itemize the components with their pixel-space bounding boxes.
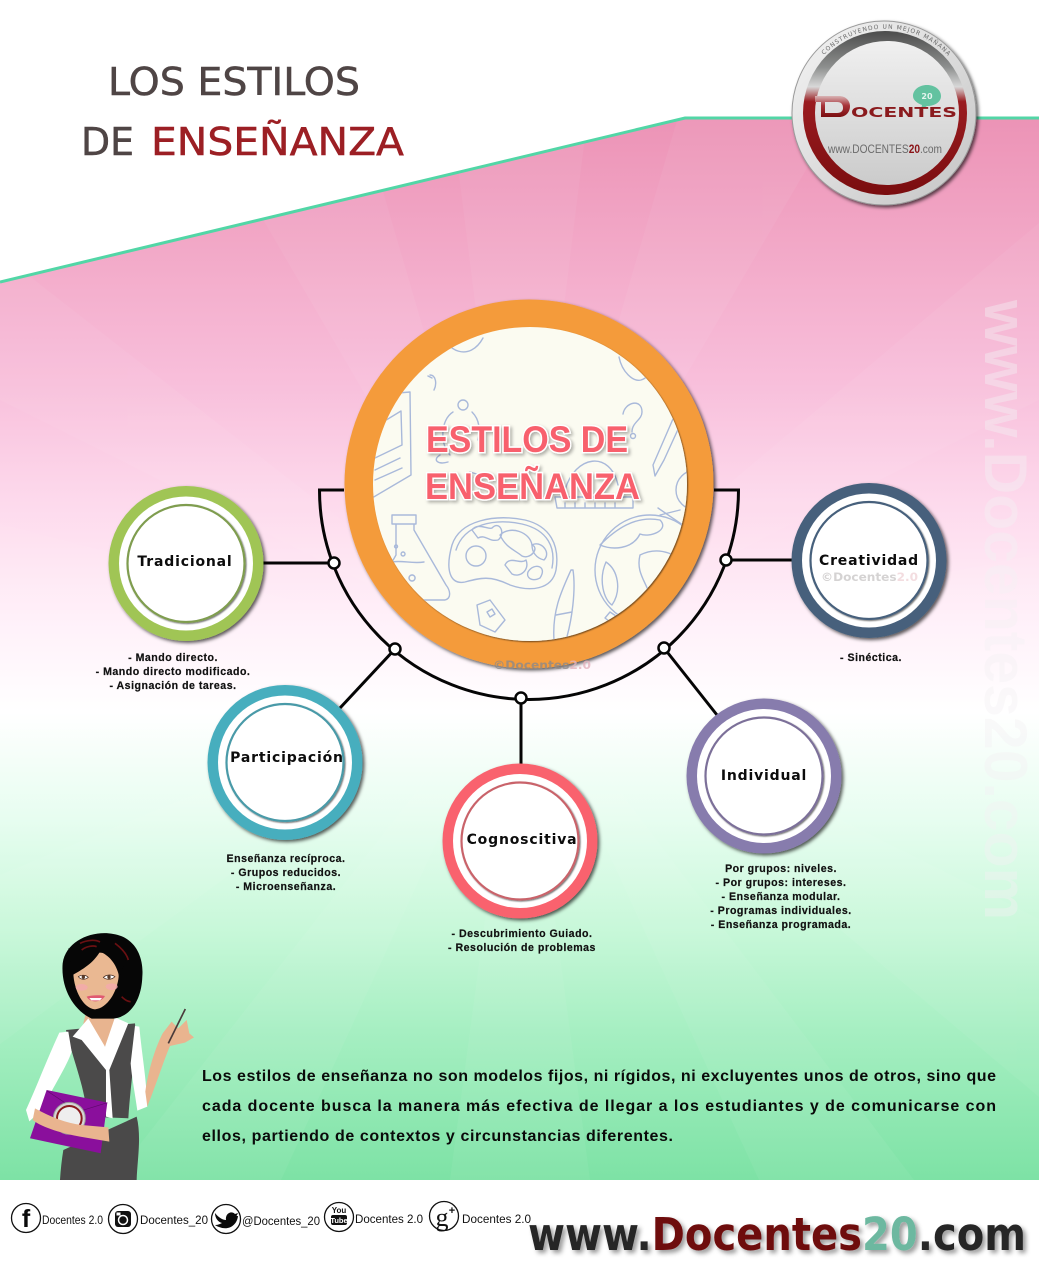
teacher illustration [26,933,194,1180]
list: Participación: - Grupos reducidos. [231,867,341,879]
node: Participación: Participación [230,750,344,766]
node: Creatividad [792,483,946,638]
node: Tradicional: Tradicional [137,554,233,570]
doodles: school sketches [374,337,687,640]
list: Tradicional: - Mando directo. [128,652,218,664]
watermark: docentes 2.0 below central circle: ©Docentes 2.0 [493,658,591,672]
icon: instagram [108,1204,138,1234]
list: Individual [710,863,852,931]
paragraph: ellos, partiendo de contextos y circunstancias diferentes. [202,1128,673,1145]
title: ENSEÑANZA [151,120,404,164]
logo badge: Docentes 2.0: 20 [921,92,933,101]
list: Cognoscitiva: - Resolución de problemas [448,942,596,954]
footer social links: @Docentes_20 [242,1216,320,1228]
list: Individual: - Enseñanza modular. [722,891,840,903]
node: Tradicional [108,486,264,641]
title [81,60,404,164]
title: LOS ESTILOS [108,60,360,104]
paragraph: Los estilos de enseñanza no son modelos fijos, ni rígidos, ni excluyentes unos de otros, sino que [202,1068,996,1085]
list: Tradicional [96,652,250,692]
watermark: vertical website: www.Docentes20.com [972,299,1039,920]
central circle: estilos de enseñanza [344,300,716,672]
title: DE [81,120,134,164]
list: Tradicional: - Mando directo modificado. [96,666,250,678]
footer social links: Docentes 2.0 [42,1215,103,1227]
logo badge: Docentes 2.0: www.DOCENTES20.com [827,144,942,156]
list: Cognoscitiva: - Descubrimiento Guiado. [452,928,592,940]
icon: facebook [12,1204,40,1233]
icon: facebook: f [22,1205,31,1233]
footer social links: Docentes_20 [140,1215,208,1227]
list: Individual: - Por grupos: intereses. [716,877,846,889]
icon: google plus [430,1202,458,1232]
central heading text: ESTILOS DE [426,419,628,460]
footer social links [12,1202,531,1234]
list: Individual: Por grupos: niveles. [725,863,837,875]
central heading text [425,419,640,507]
icon: youtube: You [332,1206,346,1215]
list: Creatividad: - Sinéctica. [840,652,902,664]
icon: google plus: + [449,1205,455,1217]
node: Creatividad: Creatividad [819,553,919,569]
central heading text: ENSEÑANZA [425,465,640,507]
icon: youtube: Tube [330,1216,348,1225]
icon: google plus: g [436,1203,448,1232]
paragraph [202,1068,996,1145]
node: Cognoscitiva [442,764,598,918]
list: Individual: - Enseñanza programada. [711,919,851,931]
connector arc with nodes [263,490,792,764]
footer website: www.Docentes20.com [528,1208,1026,1261]
list: Cognoscitiva [448,928,596,954]
icon: twitter [212,1204,240,1234]
footer social links: Docentes 2.0 [462,1214,531,1226]
node: Individual [686,698,842,854]
icon: youtube [324,1202,354,1232]
logo badge: Docentes 2.0 [790,20,982,210]
list: Tradicional: - Asignación de tareas. [109,680,237,692]
footer social links: Docentes 2.0 [355,1214,423,1226]
node: Individual: Individual [721,768,807,784]
list: Participación: Enseñanza recíproca. [227,853,345,865]
list: Participación [227,853,345,893]
node: Creatividad: ©Docentes 2.0 [821,570,918,584]
node: Participación [208,685,362,840]
list: Individual: - Programas individuales. [710,905,852,917]
node: Cognoscitiva: Cognoscitiva [467,832,577,848]
paragraph: cada docente busca la manera más efectiva de llegar a los estudiantes y de comunicarse con [202,1098,996,1115]
logo badge: Docentes 2.0: OCENTES [851,106,957,121]
list: Participación: - Microenseñanza. [236,881,336,893]
